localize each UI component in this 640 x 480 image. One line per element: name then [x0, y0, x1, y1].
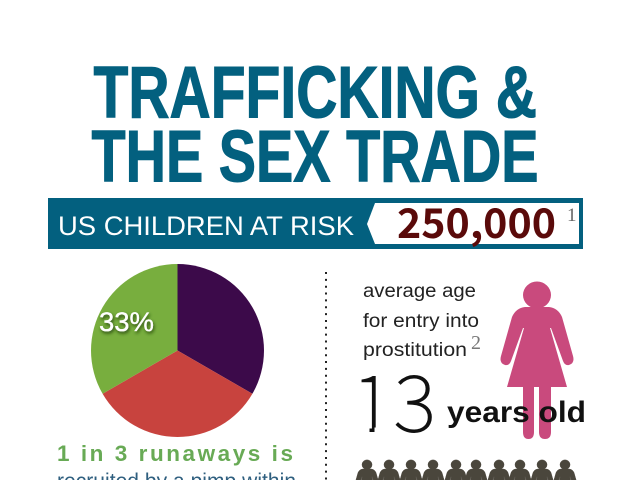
- person 4: [420, 460, 446, 480]
- person 9: [529, 460, 555, 480]
- pie label 33%: 33%: [99, 307, 154, 337]
- banner label: US CHILDREN AT RISK: [58, 211, 354, 241]
- person 3: [398, 460, 424, 480]
- person 6: [463, 460, 489, 480]
- pie chart: [91, 264, 264, 437]
- number 250,000: 250,000: [397, 190, 556, 250]
- number 13: 13: [351, 342, 436, 454]
- icon row: small people: [354, 460, 578, 480]
- person 2: [376, 460, 402, 480]
- footnote 1: 1: [567, 205, 576, 226]
- statistic heading: 1 in 3 runaways is: [57, 441, 293, 466]
- person 1: [354, 460, 380, 480]
- average age text: [363, 281, 481, 361]
- dotted divider: [325, 272, 327, 480]
- average age text: for entry into: [363, 311, 479, 332]
- average age text: average age: [363, 281, 476, 302]
- person 8: [507, 460, 533, 480]
- banner: US children at risk: [48, 190, 583, 250]
- person 5: [443, 460, 469, 480]
- title: [92, 52, 538, 198]
- average age text: prostitution: [363, 340, 467, 361]
- footnote 2: 2: [471, 332, 481, 354]
- years old: years old: [447, 396, 586, 429]
- person 7: [486, 460, 512, 480]
- icon: woman: [500, 282, 574, 439]
- number plate: [367, 203, 579, 244]
- person 10: [552, 460, 578, 480]
